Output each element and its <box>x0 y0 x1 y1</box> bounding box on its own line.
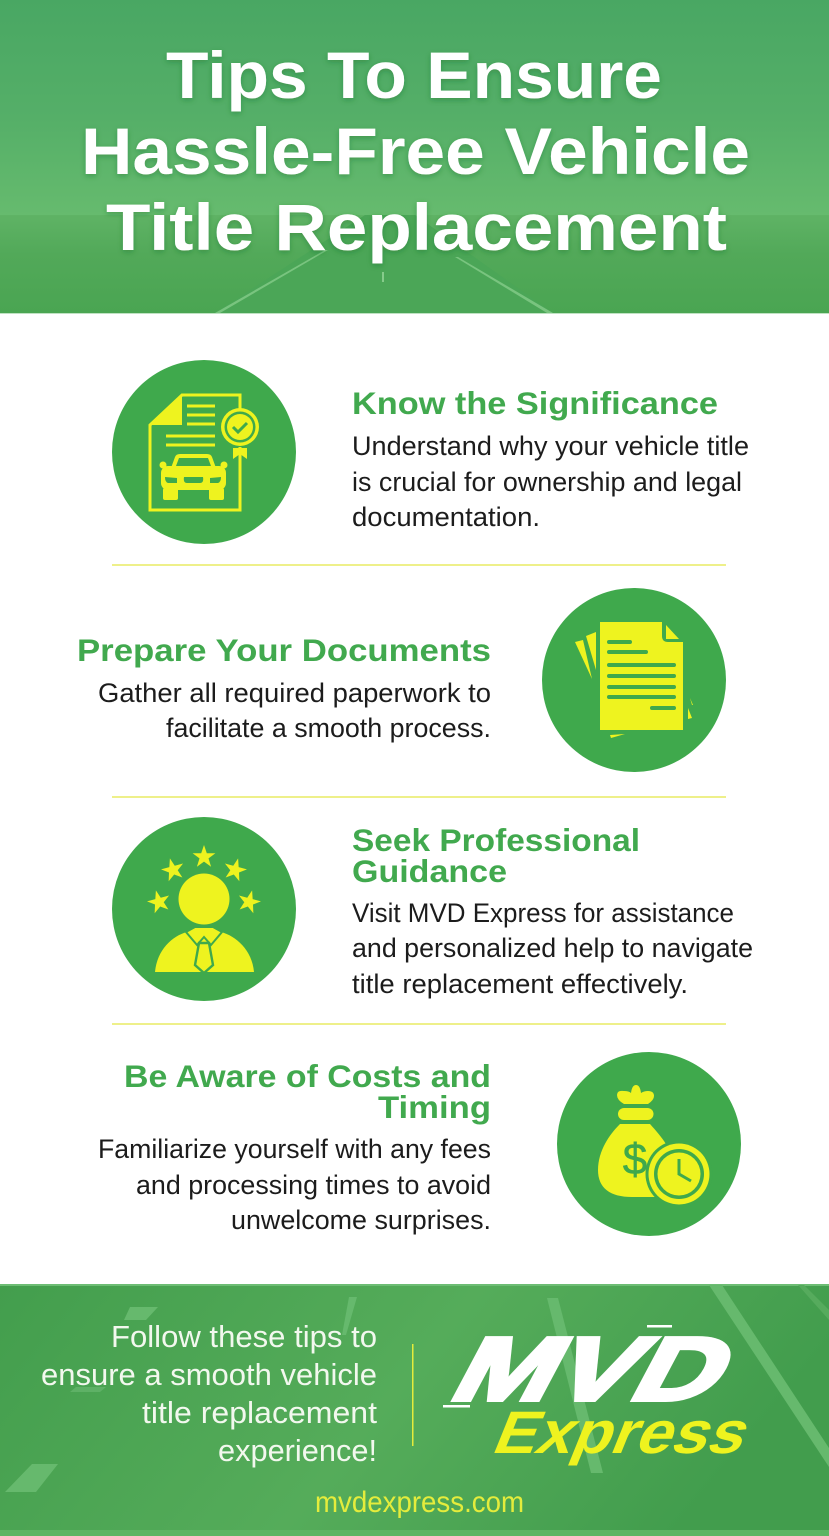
icon: stack of documents <box>542 588 726 772</box>
panel: know the significance <box>112 360 749 544</box>
text block <box>352 431 749 532</box>
heading: Be Aware of Costs and <box>124 1058 491 1094</box>
icon: money bag and clock: $ <box>623 1135 647 1184</box>
text block: and processing times to avoid <box>136 1170 491 1200</box>
text block: and personalized help to navigate <box>352 933 753 963</box>
heading: Know the Significance <box>352 385 718 421</box>
panel: be aware of costs and timing <box>98 1052 741 1236</box>
footer banner background <box>0 1284 829 1536</box>
title: Hassle-Free Vehicle <box>81 114 750 188</box>
heading: Seek Professional <box>352 822 640 858</box>
text block: title replacement effectively. <box>352 969 688 999</box>
closing message <box>41 1319 377 1468</box>
closing message: ensure a smooth vehicle <box>41 1357 377 1392</box>
heading <box>352 822 640 889</box>
text block: documentation. <box>352 502 540 532</box>
heading: Guidance <box>352 853 507 889</box>
text block: is crucial for ownership and legal <box>352 467 742 497</box>
closing message: experience! <box>218 1433 377 1468</box>
text block <box>352 898 753 999</box>
icon: vehicle title document <box>112 360 296 544</box>
header banner: road and field background <box>0 0 829 314</box>
logo: MVD Express: MVD <box>436 1320 755 1420</box>
closing message: Follow these tips to <box>111 1319 377 1354</box>
panel: seek professional guidance <box>112 817 753 1001</box>
heading: Timing <box>378 1089 491 1125</box>
icon: money bag and clock <box>557 1052 741 1236</box>
text block <box>98 678 491 743</box>
panel: prepare your documents <box>77 588 726 772</box>
title <box>81 38 750 264</box>
title: Title Replacement <box>106 190 727 264</box>
text block: facilitate a smooth process. <box>166 713 491 743</box>
logo: MVD Express: Express <box>485 1400 761 1466</box>
closing message: title replacement <box>142 1395 377 1430</box>
icon: professional with stars <box>112 817 296 1001</box>
text block: Visit MVD Express for assistance <box>352 898 734 928</box>
text block: Understand why your vehicle title <box>352 431 749 461</box>
text block <box>98 1134 491 1235</box>
text block: Familiarize yourself with any fees <box>98 1134 491 1164</box>
website url: mvdexpress.com <box>315 1486 524 1519</box>
heading <box>124 1058 491 1125</box>
text block: unwelcome surprises. <box>231 1205 491 1235</box>
logo: MVD Express <box>436 1320 761 1466</box>
text block: Gather all required paperwork to <box>98 678 491 708</box>
heading: Prepare Your Documents <box>77 632 491 668</box>
title: Tips To Ensure <box>166 38 662 112</box>
